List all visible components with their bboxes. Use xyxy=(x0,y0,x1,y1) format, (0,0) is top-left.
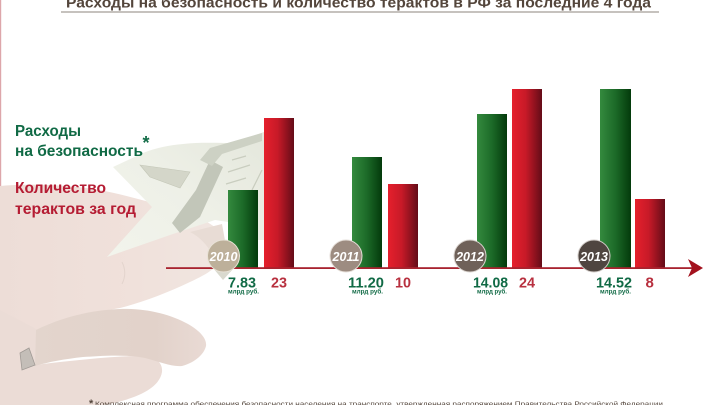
bar chart xyxy=(228,89,665,268)
values 2010 xyxy=(228,274,287,296)
bars 2011 xyxy=(352,157,418,268)
values 2010: 23 xyxy=(271,274,287,292)
legend: security spending: на безопасность xyxy=(15,143,143,160)
banknote engraved rectangle xyxy=(140,165,190,188)
banknote ornamental band ONE DOLLAR xyxy=(172,160,223,233)
values 2010: 7.83 xyxy=(228,274,256,292)
bars 2010 xyxy=(228,118,294,268)
values 2011: 10 xyxy=(395,274,411,292)
legend: number of attacks: Количество xyxy=(15,180,106,197)
banknote tail under year marker xyxy=(213,268,234,280)
year marker 2013 xyxy=(578,240,610,272)
values 2011 xyxy=(348,274,411,296)
legend: security spending: Расходы xyxy=(15,123,81,140)
banknote upper band xyxy=(200,133,262,166)
title underline xyxy=(61,12,659,13)
timeline arrow xyxy=(166,259,703,277)
illustration: hand launching a banknote plane xyxy=(0,132,264,405)
year marker 2013: 2013 xyxy=(579,250,608,264)
values 2013: 8 xyxy=(646,274,654,292)
legend: security spending: * xyxy=(142,133,150,153)
values 2011: млрд руб. xyxy=(352,288,383,296)
left edge line xyxy=(0,0,1,405)
values 2010: млрд руб. xyxy=(228,288,259,296)
year marker 2011 xyxy=(330,240,362,272)
legend: number of attacks xyxy=(15,180,136,218)
ring xyxy=(20,348,35,370)
finger crease xyxy=(122,262,125,284)
hand: thumb and palm xyxy=(0,185,226,330)
banknote fine text xyxy=(226,156,262,190)
legend: security spending xyxy=(15,123,150,160)
hand: back of hand and lower finger xyxy=(0,300,162,405)
year marker 2012: 2012 xyxy=(455,250,484,264)
bars 2012 xyxy=(477,89,542,268)
year marker 2010 xyxy=(208,240,240,272)
values 2012: млрд руб. xyxy=(477,288,507,296)
hand: middle finger xyxy=(35,309,206,366)
banknote plane body xyxy=(107,132,264,257)
legend: number of attacks: терактов за год xyxy=(15,201,136,218)
values 2013: 14.52 xyxy=(596,274,632,292)
year marker 2012 xyxy=(454,240,486,272)
values 2012 xyxy=(473,274,536,296)
footnote xyxy=(89,398,663,405)
values 2012: 24 xyxy=(519,274,536,292)
values 2012: 14.08 xyxy=(473,274,508,292)
values 2011: 11.20 xyxy=(348,274,384,292)
banknote shadow on thumb xyxy=(190,224,226,262)
year marker 2010: 2010 xyxy=(209,250,237,264)
values 2013 xyxy=(596,274,654,296)
year marker 2011: 2011 xyxy=(332,250,359,264)
bars 2013 xyxy=(600,89,665,268)
values 2013: млрд руб. xyxy=(600,288,631,296)
